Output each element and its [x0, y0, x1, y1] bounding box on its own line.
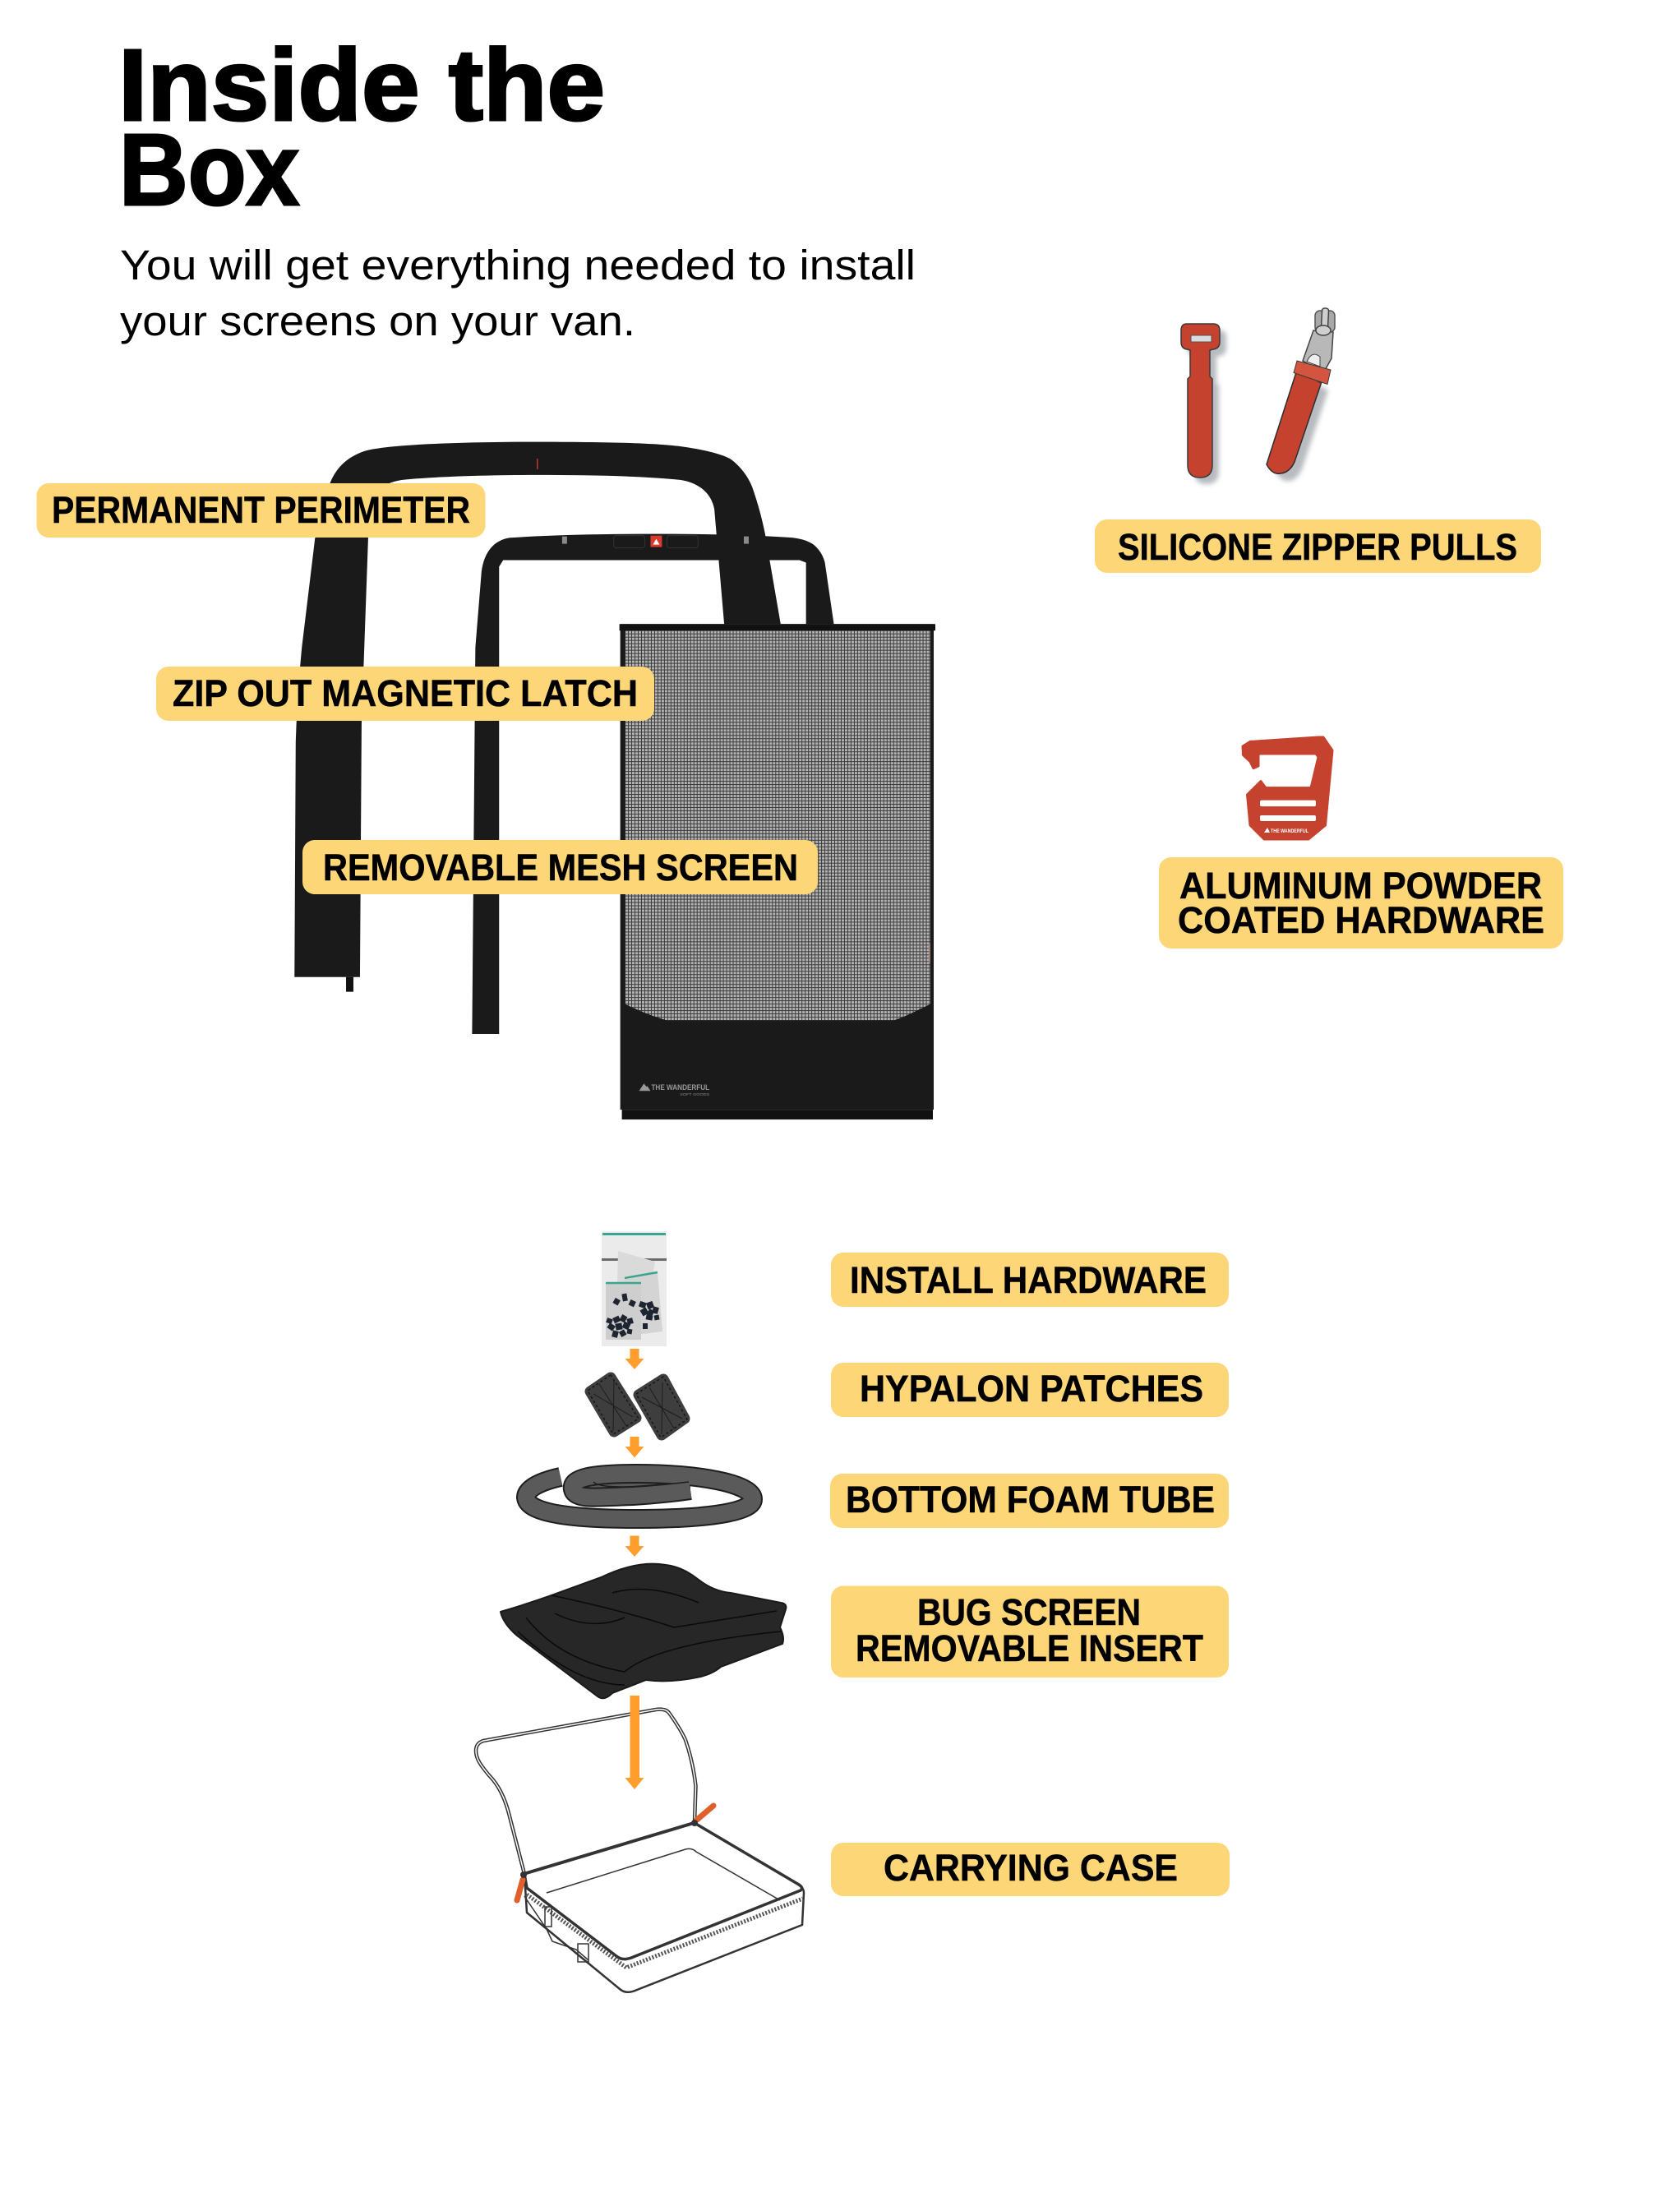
label: aluminum powder coated hardware: COATED HARDWARE	[1178, 899, 1544, 941]
label: aluminum powder coated hardware	[1159, 857, 1563, 948]
icon: aluminum hook buckle: THE WANDERFUL	[1271, 828, 1308, 834]
label: carrying case	[831, 1843, 1230, 1896]
case zipper pulls	[517, 1806, 713, 1900]
label: hypalon patches: HYPALON PATCHES	[860, 1368, 1203, 1410]
illustration: zip out magnetic latch frame	[472, 534, 834, 1034]
illustration: permanent perimeter frame	[294, 442, 781, 992]
subtitle text: You will get everything needed to install	[120, 242, 916, 288]
title	[118, 30, 605, 227]
label: permanent perimeter: PERMANENT PERIMETER	[52, 489, 470, 531]
label: silicone zipper pulls: SILICONE ZIPPER PULLS	[1118, 526, 1517, 568]
label: bug screen removable insert	[831, 1586, 1229, 1678]
subtitle text: your screens on your van.	[120, 298, 635, 344]
icon: silicone zipper pull, flat	[1181, 324, 1226, 484]
label: removable mesh screen: REMOVABLE MESH SCREEN	[323, 847, 798, 888]
case base	[524, 1823, 804, 1992]
zipper slider	[1303, 308, 1335, 373]
icon: carrying case	[476, 1710, 804, 1992]
label: hypalon patches	[831, 1363, 1229, 1417]
icon: aluminum hook buckle	[1243, 737, 1332, 839]
icon: folded bug screen insert	[501, 1564, 786, 1698]
case lid	[476, 1710, 695, 1874]
logo on mesh screen: SOFT GOODS	[680, 1092, 710, 1097]
arrow: bag to patches	[625, 1349, 644, 1369]
label: aluminum powder coated hardware: ALUMINUM POWDER	[1179, 865, 1542, 907]
label: bug screen removable insert: REMOVABLE INSERT	[856, 1627, 1203, 1669]
icon: hypalon patches	[588, 1375, 687, 1438]
arrow: patches to foam tube	[625, 1437, 644, 1458]
title: Box	[119, 114, 299, 227]
label: install hardware: INSTALL HARDWARE	[850, 1259, 1207, 1301]
icon: bottom foam tube	[526, 1474, 753, 1519]
arrow: bug screen to carrying case	[625, 1696, 644, 1789]
icon: install hardware bag	[602, 1231, 667, 1346]
label: zip out magnetic latch: ZIP OUT MAGNETIC LATCH	[173, 672, 638, 714]
label: bug screen removable insert: BUG SCREEN	[917, 1591, 1141, 1633]
logo on mesh screen: THE WANDERFUL	[651, 1083, 710, 1091]
subtitle text	[120, 242, 916, 344]
label: bottom foam tube: BOTTOM FOAM TUBE	[846, 1479, 1215, 1521]
hardware pieces	[606, 1294, 659, 1338]
label: carrying case: CARRYING CASE	[884, 1847, 1178, 1889]
logo on mesh screen	[639, 1083, 710, 1097]
illustration: removable mesh screen	[620, 624, 935, 1119]
icon: red latch badge	[650, 536, 662, 547]
title: Inside the	[118, 30, 605, 142]
icon: silicone zipper pull, attached to slider	[1267, 308, 1335, 481]
arrow: foam tube to bug screen	[625, 1535, 644, 1557]
